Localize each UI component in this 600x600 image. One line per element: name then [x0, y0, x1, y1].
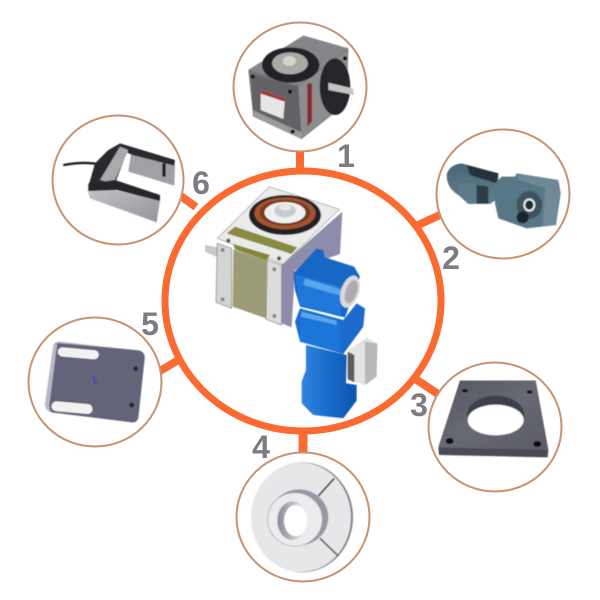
circle 3 outline [428, 362, 562, 492]
circle 6 outline [52, 116, 184, 244]
circle 4 outline [236, 452, 370, 582]
connector: ring to circle 6 [178, 194, 196, 207]
product 4: split collar [251, 462, 353, 572]
product 3: mounting plate [438, 381, 548, 457]
connector: ring to circle 4 [298, 430, 308, 455]
connector: ring to circle 2 [416, 215, 440, 226]
number 4: 4 [252, 429, 270, 465]
number 5: 5 [141, 306, 159, 342]
product 2: geared motor [447, 163, 561, 228]
product 5: flat plate with slots [45, 342, 145, 422]
product 1: cam indexer [248, 36, 354, 139]
circle 1 outline [234, 22, 366, 152]
number 3: 3 [410, 387, 428, 423]
product 6: fork sensor [63, 143, 175, 222]
number 6: 6 [192, 165, 210, 201]
central product: indexer with blue motor [205, 187, 377, 418]
central orange ring [165, 171, 441, 431]
connector: ring to circle 5 [160, 359, 180, 371]
circle 5 outline [28, 318, 162, 446]
connector: ring to circle 1 [296, 150, 304, 172]
number 2: 2 [442, 240, 460, 276]
connector: ring to circle 3 [414, 378, 438, 394]
circle 2 outline [436, 130, 570, 258]
number 1: 1 [337, 138, 355, 174]
